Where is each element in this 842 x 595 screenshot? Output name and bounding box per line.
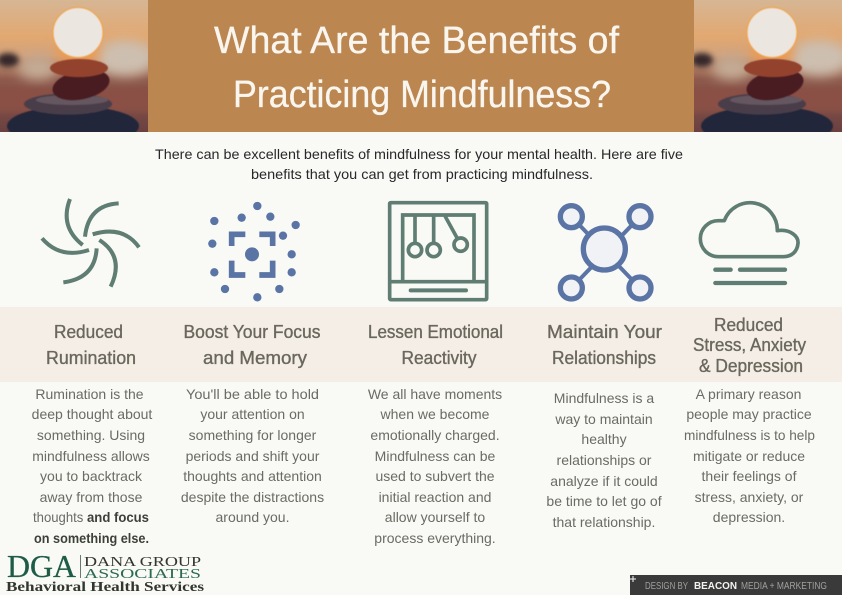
body text: that relationship.: [553, 514, 655, 530]
body text: way to maintain: [554, 411, 653, 427]
heading: Lessen Emotional: [368, 322, 503, 342]
heading: [46, 322, 136, 368]
logo: Dana Group Associates: DANA GROUP: [84, 554, 201, 569]
icon: network of connected nodes: [560, 206, 651, 299]
body text: Mindfulness can be: [375, 448, 496, 464]
body text: deep thought about: [32, 406, 152, 422]
title: What Are the Benefits of: [214, 20, 619, 62]
heading: Reactivity: [402, 348, 476, 368]
heading: Relationships: [552, 348, 656, 368]
body text: A primary reason: [696, 386, 801, 402]
heading: Rumination: [46, 348, 136, 368]
body text: [368, 386, 502, 546]
body text: emotionally charged.: [370, 427, 500, 443]
logo: Dana Group Associates: [6, 548, 205, 595]
body text: [32, 386, 152, 546]
heading: & Depression: [699, 356, 803, 376]
body text: process everything.: [374, 530, 496, 546]
photo: right balanced stones at sunset: [684, 0, 842, 146]
body text: relationships or: [557, 452, 652, 468]
body text: mindfulness allows: [32, 448, 150, 464]
heading: [693, 315, 806, 376]
body text: [684, 386, 815, 525]
icon: focus target with dots: [208, 202, 300, 301]
body text: despite the distractions: [181, 489, 324, 505]
body text: your attention on: [200, 406, 305, 422]
body text: around you.: [216, 509, 289, 525]
column 4: maintain relationships: [546, 322, 662, 530]
heading: and Memory: [203, 348, 307, 368]
icon: spiral: [42, 199, 139, 287]
intro text: benefits that you can get from practicing mindfulness.: [251, 166, 593, 182]
body text: healthy: [581, 431, 627, 447]
logo: Dana Group Associates: DGA: [7, 548, 76, 584]
body text: allow yourself to: [385, 509, 485, 525]
heading: [368, 322, 503, 368]
heading: [547, 322, 662, 368]
heading band: [0, 307, 842, 382]
footer credit bar: MEDIA + MARKETING: [741, 581, 827, 592]
body text: mitigate or reduce: [693, 448, 805, 464]
column 2: boost focus and memory: [181, 322, 324, 525]
body text: when we become: [380, 406, 490, 422]
title: Practicing Mindfulness?: [233, 74, 611, 116]
body text: people may practice: [686, 406, 812, 422]
footer credit bar: DESIGN BY: [645, 581, 688, 592]
body text: their feelings of: [702, 468, 797, 484]
heading: Stress, Anxiety: [693, 335, 806, 355]
title banner: [148, 0, 694, 132]
heading: [184, 322, 320, 368]
body text: stress, anxiety, or: [695, 489, 804, 505]
footer credit bar: BEACON: [694, 581, 737, 592]
body text: mindfulness is to help: [684, 427, 815, 443]
body text: Rumination is the: [35, 386, 144, 402]
body text: away from those: [40, 489, 143, 505]
body text: You'll be able to hold: [186, 386, 319, 402]
body text: initial reaction and: [379, 489, 491, 505]
column 5: reduced stress, anxiety and depression: [684, 315, 815, 525]
photo: left balanced stones at sunset: [0, 0, 160, 146]
body text: you to backtrack: [40, 468, 143, 484]
intro text: [155, 146, 683, 182]
column 1: reduced rumination: [32, 322, 152, 546]
body text: periods and shift your: [186, 448, 320, 464]
heading: Reduced: [54, 322, 123, 342]
column 3: lessen emotional reactivity: [368, 322, 503, 546]
body text: thoughts and attention: [183, 468, 322, 484]
logo: Dana Group Associates: Behavioral Health Services: [6, 580, 205, 595]
icon: cloud with fog lines: [700, 203, 798, 283]
body text: [181, 386, 324, 525]
title: [214, 20, 619, 116]
intro text: There can be excellent benefits of mindfulness for your mental health. Here are five: [155, 146, 683, 162]
body text: be time to let go of: [546, 493, 662, 509]
heading: Reduced: [714, 315, 783, 335]
icon: newton's cradle: [390, 203, 487, 300]
body text: analyze if it could: [550, 473, 658, 489]
body text: something. Using: [37, 427, 145, 443]
body text: used to subvert the: [375, 468, 495, 484]
body text: Mindfulness is a: [554, 390, 654, 406]
body text: on something else.: [34, 530, 149, 546]
body text: something for longer: [189, 427, 317, 443]
body text: [546, 390, 662, 530]
heading: Maintain Your: [547, 322, 662, 342]
body text: We all have moments: [368, 386, 502, 402]
footer credit bar: [630, 575, 842, 595]
body text: thoughts and focus: [33, 509, 149, 525]
heading: Boost Your Focus: [184, 322, 320, 342]
body text: depression.: [713, 509, 785, 525]
logo: Dana Group Associates: ASSOCIATES: [84, 566, 201, 581]
